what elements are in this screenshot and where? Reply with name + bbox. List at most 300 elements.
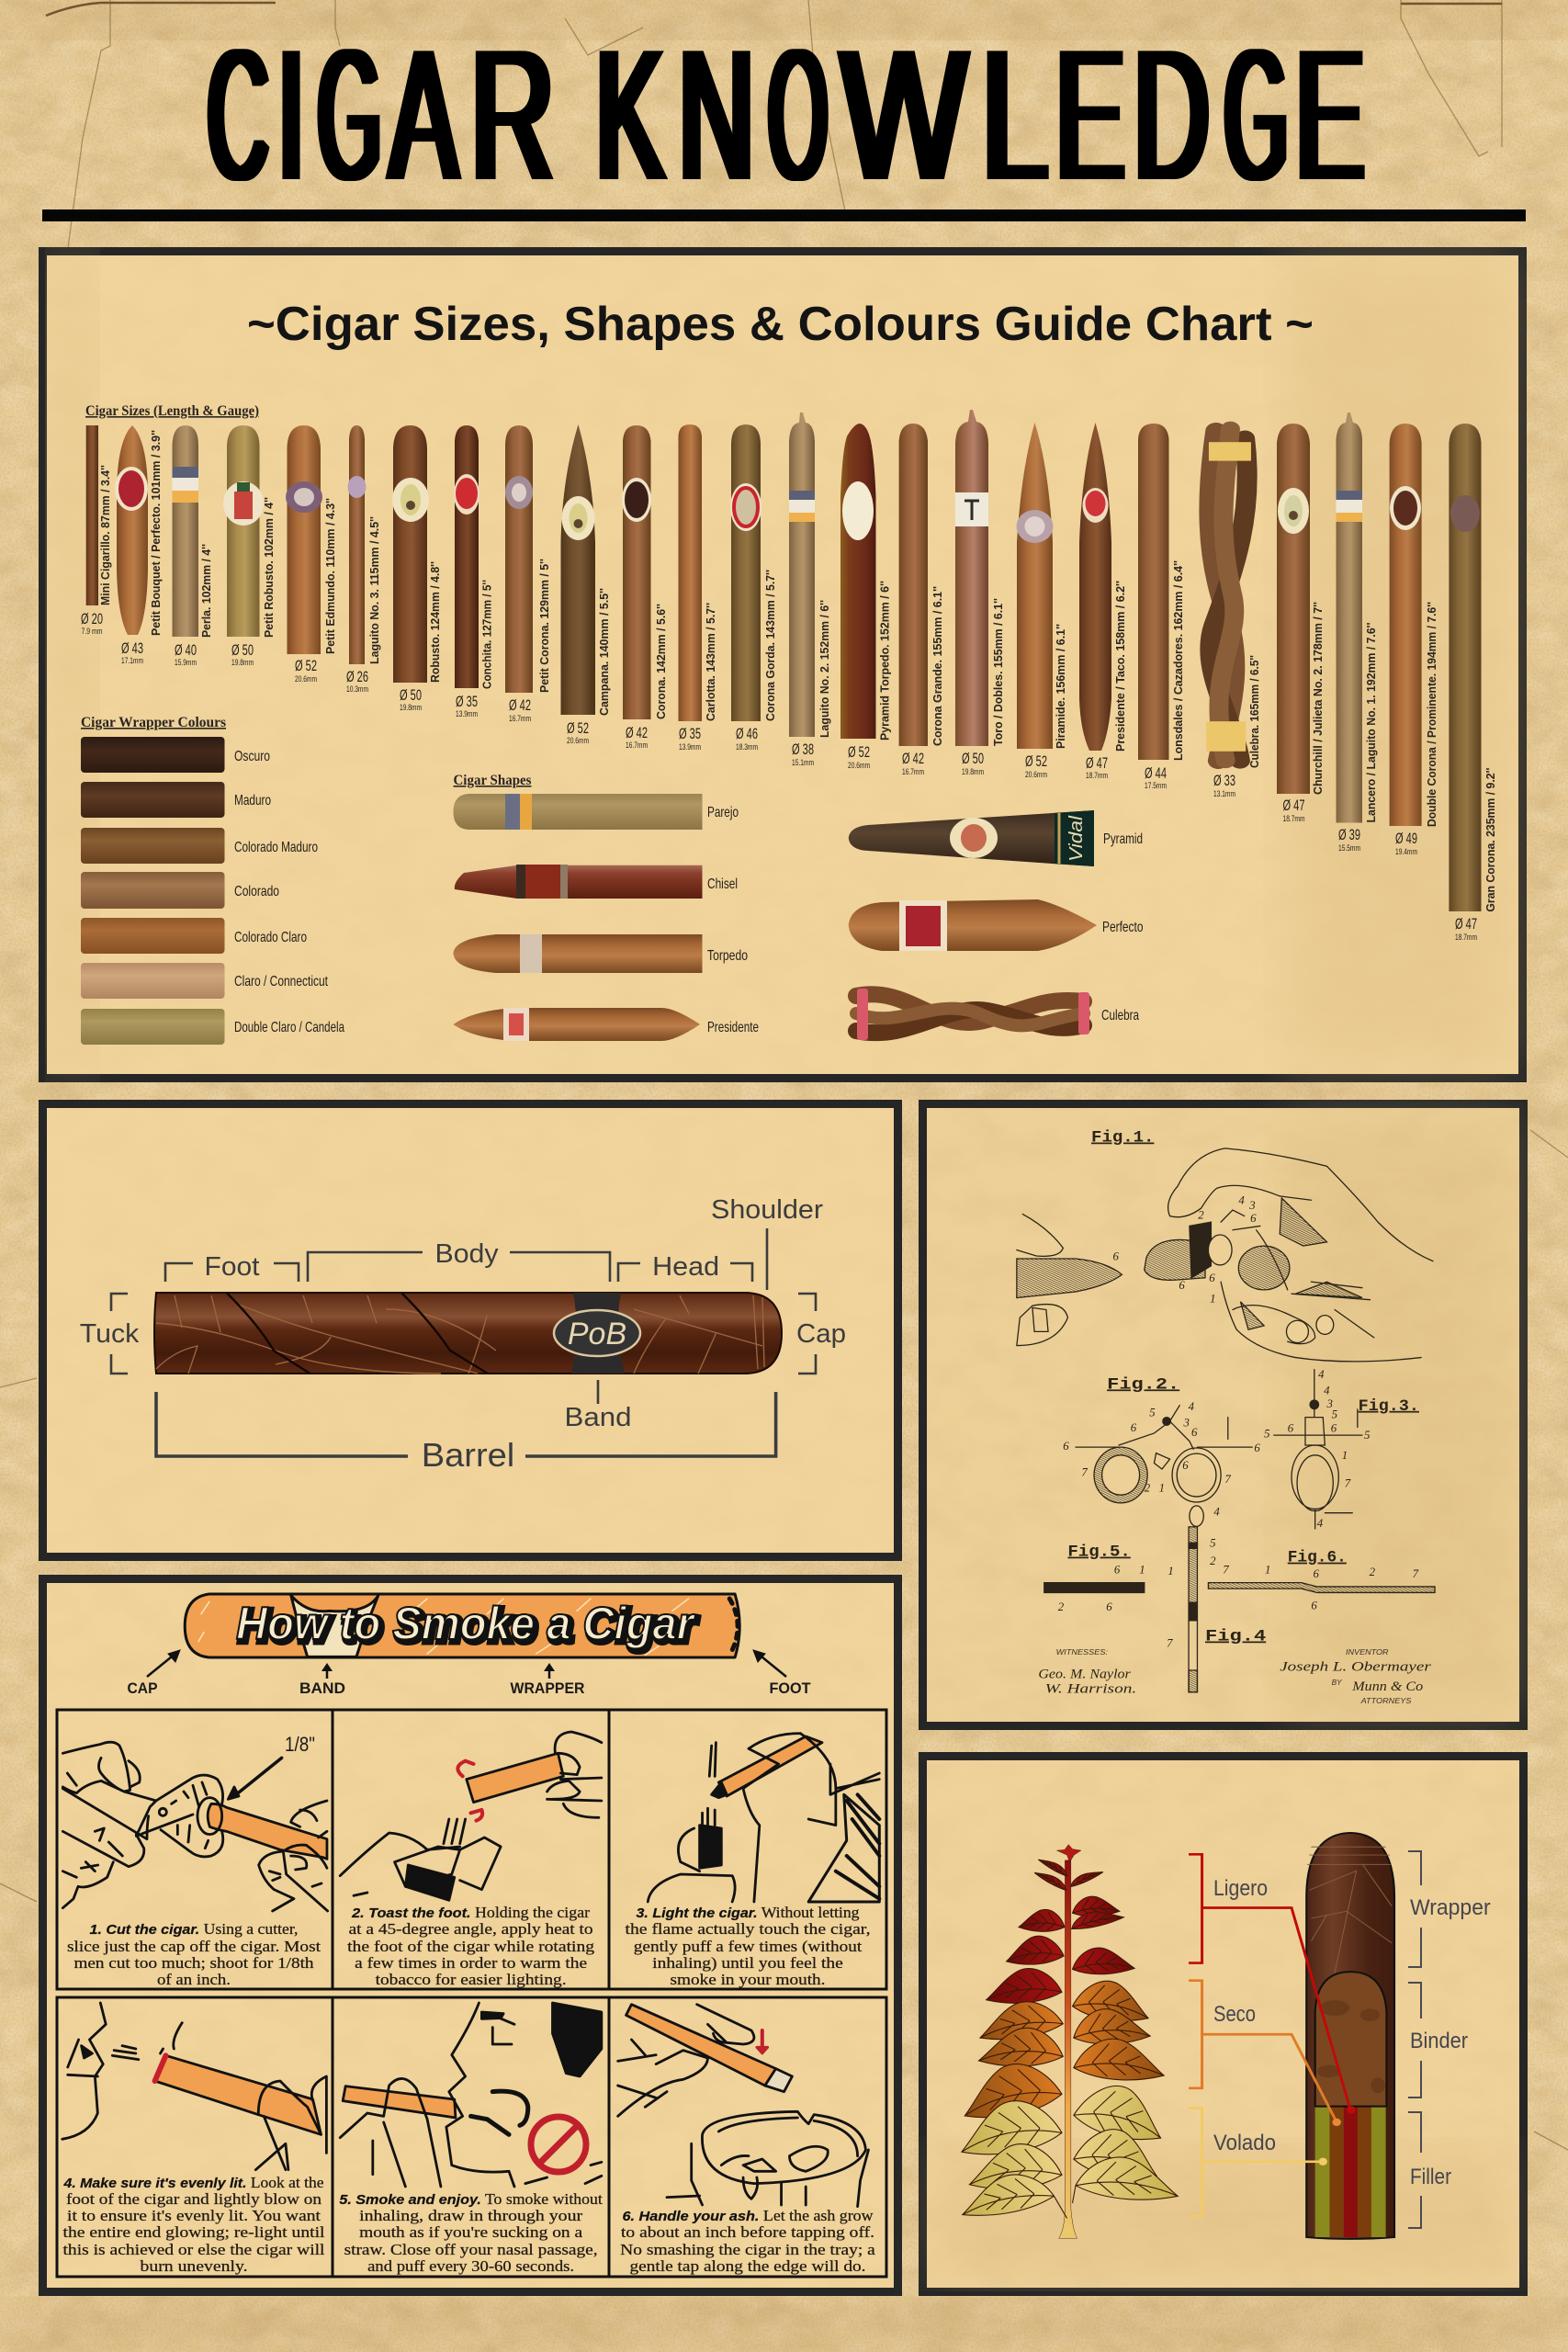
cigar: Petit Robusto: [223, 425, 276, 667]
figure 3: closed cutter: 1: [1342, 1448, 1348, 1462]
cigar: Robusto: [392, 425, 442, 712]
cigar: Corona: 16.7mm: [626, 741, 648, 750]
patent signatures: BY: [1332, 1678, 1343, 1687]
figure 3: closed cutter: Fig.3.: [1359, 1398, 1419, 1416]
cigar: Culebra: Ø 33: [1213, 772, 1235, 789]
chart heading: ~Cigar Sizes, Shapes & Colours Guide Chart ~: [247, 298, 1314, 351]
figure 3: closed cutter: 5: [1264, 1426, 1270, 1440]
caption: step 3: 3. Light the cigar. Without letting: [636, 1904, 860, 1921]
title: Cigar Knowledge: I: [279, 11, 303, 220]
cigar: Petit Bouquet: Ø 43: [121, 639, 143, 657]
patent signatures: Joseph L. Obermayer: [1280, 1659, 1431, 1674]
swatch: Colorado Claro: Colorado Claro: [234, 930, 307, 945]
figure 3: closed cutter: 7: [1345, 1476, 1351, 1490]
caption: step 5: and puff every 30-60 seconds.: [367, 2257, 574, 2275]
cigar: Churchill: [1277, 424, 1325, 823]
cigar: Presidente: Ø 47: [1086, 754, 1108, 772]
volado leaves: [953, 2077, 1182, 2222]
cigar: Mini Cigarillo: 7.9 mm: [81, 627, 103, 636]
cigar: Presidente: [1079, 423, 1127, 780]
shape: Culebra: [856, 989, 1139, 1040]
figure 6: section: 6: [1314, 1566, 1319, 1580]
figure 1: hands with cutter: [1017, 1129, 1433, 1362]
figure 1: hands with cutter: Fig.1.: [1091, 1129, 1154, 1148]
figure 5: edge bar: Fig.5.: [1067, 1544, 1131, 1562]
figure 6: section: 6: [1311, 1599, 1317, 1612]
title: Cigar Knowledge: G: [318, 11, 381, 220]
cigar: Gran Corona: [1449, 424, 1497, 942]
leaf priming: Volado: Volado: [1213, 2131, 1276, 2155]
cigar: Perla: Perla. 102mm / 4'': [199, 544, 213, 638]
heading: wrapper colours: Cigar Wrapper Colours: [81, 715, 226, 730]
caption: step 6: gentle tap along the edge will do.: [630, 2257, 865, 2275]
caption: step 1: men cut too much; shoot for 1/8th: [73, 1954, 314, 1972]
figure 4: side view: 5: [1210, 1535, 1216, 1550]
cigar: Petit Bouquet: [115, 425, 163, 665]
cigar: Campana: Ø 52: [567, 719, 589, 737]
cigar: Corona Grande: Corona Grande. 155mm / 6.1'': [931, 586, 944, 746]
swatch: Double Claro / Candela: Double Claro / Candela: [234, 1020, 344, 1035]
caption: step 4: foot of the cigar and lightly blow on: [66, 2190, 321, 2208]
caption: step 2: [347, 1904, 594, 1988]
cigar layer label: Binder: [1408, 1983, 1468, 2098]
figure 3: closed cutter: 5: [1364, 1428, 1371, 1442]
figure 2: open cutter: 6: [1191, 1425, 1198, 1439]
illustration: lighting the cigar: [648, 1734, 879, 1902]
cigar: Double Corona: Double Corona / Prominente. 194mm / 7.6'': [1425, 602, 1438, 827]
label and line: Band: Band: [564, 1403, 632, 1432]
cigar: Petit Bouquet: 17.1mm: [121, 656, 143, 665]
cigar: Corona Gorda: Corona Gorda. 143mm / 5.7'': [763, 570, 777, 721]
cigar: Double Corona: [1390, 424, 1438, 856]
cigar: Gran Corona: 18.7mm: [1455, 933, 1477, 942]
arrow and label: CAP: [127, 1650, 180, 1697]
cigar: Gran Corona: Gran Corona. 235mm / 9.2'': [1483, 768, 1497, 912]
cigar: Gran Corona: Ø 47: [1455, 915, 1477, 933]
cigar: Toro: Toro / Dobles. 155mm / 6.1'': [991, 598, 1005, 746]
bracket and label: Tuck: [80, 1294, 140, 1374]
step 5: smoke and enjoy: [339, 2003, 603, 2275]
cigar: Mini Cigarillo: Ø 20: [81, 610, 103, 628]
cigar: Petit Robusto: Ø 50: [231, 641, 254, 659]
panel: sizes, shapes and colours guide chart: [42, 252, 1523, 1079]
cigar: Petit Corona: Petit Corona. 129mm / 5'': [537, 559, 551, 693]
caption: step 5: 5. Smoke and enjoy. To smoke without: [339, 2190, 603, 2208]
figure 2: open cutter: 6: [1182, 1458, 1189, 1472]
cigar: Pyramid Torpedo: Ø 52: [848, 743, 870, 761]
shape: Parejo: Parejo: [707, 805, 739, 820]
title: Cigar Knowledge: K: [595, 11, 665, 220]
leaf priming: Seco: Seco: [1213, 2002, 1256, 2027]
cigar: Corona Grande: [899, 424, 944, 776]
cigar: Conchita: [454, 425, 494, 718]
cigar layer label: Filler: [1408, 2112, 1451, 2228]
caption: step 3: gently puff a few times (without: [634, 1938, 863, 1955]
label and line: Shoulder: Shoulder: [711, 1195, 823, 1225]
cigar: Lancero: Lancero / Laguito No. 1. 192mm / 7.6'': [1364, 623, 1378, 823]
cigar: Pyramid Torpedo: Pyramid Torpedo. 152mm / 6'': [878, 581, 892, 741]
cigar: Laguito No. 3: Ø 26: [346, 668, 368, 685]
figure 4: side view: Fig.4: [1205, 1628, 1266, 1646]
swatch: Oscuro: Oscuro: [234, 749, 270, 764]
caption: step 3: smoke in your mouth.: [671, 1971, 825, 1988]
cigar: Corona: Ø 42: [626, 724, 648, 741]
figure 6: section: 2: [1370, 1565, 1376, 1578]
banner: cigar with title: How to Smoke a Cigar: [239, 1600, 698, 1652]
swatch: Colorado Claro: [81, 918, 307, 954]
cigar: Laguito No. 2: Laguito No. 2. 152mm / 6'': [818, 600, 831, 738]
step 6: handle your ash: [618, 2005, 876, 2275]
panel: cigar anatomy: [42, 1104, 898, 1556]
cigar: Petit Edmundo: [286, 425, 337, 684]
cigar: Robusto: 19.8mm: [400, 703, 422, 712]
cigar: Mini Cigarillo: [81, 425, 112, 636]
cigar: Perla: [173, 425, 213, 667]
patent signatures: Munn & Co: [1351, 1679, 1423, 1694]
figure 6: section: Fig.6.: [1288, 1550, 1347, 1567]
patent signatures: W. Harrison.: [1045, 1682, 1136, 1697]
wrapper layer: [1306, 1833, 1394, 2239]
cigar: Corona Gorda: [730, 424, 777, 752]
leaf priming: Ligero: [1189, 1854, 1356, 2114]
cigar: Corona: Corona. 142mm / 5.6'': [654, 604, 668, 719]
arrow and label: BAND: [299, 1663, 345, 1697]
swatch: Colorado Maduro: [81, 828, 318, 864]
shape: Perfecto: [849, 899, 1144, 951]
caption: step 5: straw. Close off your nasal passage,: [344, 2241, 598, 2258]
cigar: Laguito No. 3: 10.3mm: [346, 684, 368, 694]
figure 3: closed cutter: 6: [1288, 1421, 1294, 1435]
cigar: Laguito No. 2: 15.1mm: [792, 758, 814, 767]
cigar: Conchita: Ø 35: [456, 693, 478, 710]
cigar: Carlotta: Ø 35: [679, 725, 701, 742]
panel: patent drawing of cigar cutter: [922, 1104, 1523, 1725]
cigar: Piramide: Ø 52: [1025, 752, 1047, 770]
cigar layer label: Wrapper: Wrapper: [1410, 1895, 1491, 1920]
illustration: tapping ash into ashtray: [618, 2005, 868, 2207]
heading: cigar sizes: Cigar Sizes (Length & Gauge): [85, 403, 259, 419]
banner: cigar with title: How to Smoke a Cigar: [236, 1598, 695, 1649]
bracket and label: Body: Body: [435, 1239, 499, 1269]
cigar: Lonsdales: 17.5mm: [1145, 781, 1167, 790]
tobacco plant: [953, 1845, 1182, 2238]
title: Cigar Knowledge: W: [840, 11, 967, 220]
figure 2: open cutter: 4: [1189, 1399, 1195, 1413]
step grid frames: [57, 1710, 886, 2277]
cigar: Robusto: Ø 50: [400, 686, 422, 704]
title: Cigar Knowledge: D: [1134, 11, 1209, 220]
illustration: cutter on cigar: [62, 1742, 328, 1911]
figure 5: edge bar: 1: [1139, 1563, 1145, 1577]
cigar layer label: Filler: Filler: [1410, 2165, 1451, 2189]
figure 2: open cutter: 6: [1131, 1420, 1137, 1434]
cigar: Culebra: 13.1mm: [1213, 789, 1235, 798]
swatch: Maduro: Maduro: [234, 793, 271, 808]
shape: Chisel: Chisel: [707, 876, 738, 892]
cigar body: [154, 1293, 782, 1374]
figure 1: hands with cutter: 3: [1248, 1198, 1256, 1212]
cigar: Lonsdales: Lonsdales / Cazadores. 162mm / 6.4'': [1171, 560, 1185, 761]
cigar: Campana: Campana. 140mm / 5.5'': [597, 588, 611, 716]
cigar: Churchill: 18.7mm: [1282, 814, 1304, 823]
shape: Torpedo: Torpedo: [707, 948, 748, 964]
ligero leaves: [983, 1855, 1134, 2007]
figure 2: open cutter: 7: [1224, 1472, 1231, 1486]
cigar: Presidente: 18.7mm: [1086, 771, 1108, 780]
cigar: Robusto: Robusto. 124mm / 4.8'': [428, 561, 442, 683]
figure 5: edge bar: [1044, 1544, 1145, 1613]
panel: how to smoke a cigar: [42, 1578, 898, 2291]
icon: no-inhale prohibition sign: [531, 2117, 586, 2172]
cigar: Lancero: [1336, 413, 1378, 853]
swatch: Colorado: Colorado: [234, 884, 279, 899]
caption: step 1: of an inch.: [157, 1971, 231, 1988]
swatch: Double Claro / Candela: [81, 1009, 344, 1045]
figure 1: hands with cutter: 2: [1198, 1208, 1204, 1222]
cigar: Lonsdales: Ø 44: [1145, 764, 1167, 782]
arrow and label: WRAPPER: [511, 1663, 584, 1697]
swatch: Oscuro: [81, 737, 270, 773]
shape: Torpedo: [454, 934, 748, 973]
shape: Chisel: [455, 865, 738, 899]
cigar: Piramide: [1016, 423, 1067, 779]
illustration: smoking profile with no-inhale sign: [340, 2003, 602, 2187]
figure 3: closed cutter: 4: [1318, 1367, 1325, 1381]
cigar: Petit Robusto: Petit Robusto. 102mm / 4'': [262, 497, 276, 638]
swatch: Claro / Connecticut: Claro / Connecticut: [234, 974, 328, 989]
caption: step 3: [625, 1904, 871, 1988]
swatch: Claro / Connecticut: [81, 963, 328, 999]
bracket and label: Head: [618, 1252, 752, 1282]
cigar: Toro: 19.8mm: [962, 767, 984, 776]
shape: Pyramid: Vidal: [1066, 815, 1087, 862]
cigar: Petit Corona: [505, 425, 551, 723]
cigar: Double Corona: Ø 49: [1395, 830, 1417, 847]
figure 4: side view: 4: [1213, 1505, 1220, 1519]
leaf priming: Ligero: Ligero: [1213, 1876, 1268, 1901]
cigar: Pyramid Torpedo: 20.6mm: [848, 761, 870, 770]
swatch: Colorado Maduro: Colorado Maduro: [234, 840, 318, 855]
cigar: Corona Gorda: 18.3mm: [736, 742, 758, 752]
panel: tobacco plant and cigar filler: [922, 1757, 1523, 2291]
seco leaves: [954, 1976, 1168, 2126]
illustration: toasting with lighter: [340, 1732, 602, 1900]
title: Cigar Knowledge: O: [769, 11, 828, 220]
bracket and label: Body: [308, 1239, 610, 1282]
arrow and label: WRAPPER: WRAPPER: [511, 1679, 584, 1697]
caption: step 2: 2. Toast the foot. Holding the cigar: [351, 1904, 591, 1921]
shape: Parejo: [454, 794, 739, 830]
shape: Pyramid: Pyramid: [1103, 831, 1143, 847]
figure 1: hands with cutter: 6: [1113, 1249, 1120, 1262]
title: Cigar Knowledge: N: [679, 11, 754, 220]
figure 2: open cutter: 6: [1063, 1439, 1069, 1453]
cigar layer label: Binder: Binder: [1410, 2029, 1468, 2053]
cigar: Churchill: Ø 47: [1282, 797, 1304, 814]
caption: step 4: the entire end glowing; re-light until: [62, 2223, 325, 2241]
patent signatures: ATTORNEYS: [1360, 1696, 1412, 1705]
cigar cross section: [1306, 1833, 1394, 2239]
label and line: Shoulder: [711, 1195, 823, 1290]
caption: step 6: [620, 2207, 876, 2275]
caption: step 6: to about an inch before tapping off.: [621, 2223, 874, 2241]
figure 3: closed cutter: [1264, 1367, 1419, 1530]
shape: Pyramid: [849, 810, 1143, 866]
cigar: Campana: [560, 424, 611, 745]
caption: step 5: [339, 2190, 603, 2275]
cigar: Piramide: 20.6mm: [1025, 770, 1047, 779]
cigar: Corona Grande: Ø 42: [902, 750, 924, 767]
figure 1: hands with cutter: 4: [1238, 1193, 1245, 1207]
cigar: Pyramid Torpedo: [840, 424, 892, 770]
figure 6: section: 7: [1413, 1566, 1419, 1580]
cigar: Petit Bouquet: Petit Bouquet / Perfecto. 101mm / 3.9'': [149, 430, 163, 636]
figure 2: open cutter: 5: [1149, 1405, 1156, 1419]
title: Cigar Knowledge: G: [1224, 11, 1288, 220]
bracket and label: Cap: Cap: [796, 1319, 846, 1349]
figure 3: closed cutter: 4: [1317, 1516, 1324, 1530]
leaf priming: Volado: [1189, 2109, 1327, 2216]
figure 6: section: 1: [1265, 1563, 1270, 1577]
bracket and label: Foot: Foot: [204, 1252, 259, 1282]
caption: step 3: inhaling) until you feel the: [652, 1954, 843, 1972]
cigar: Presidente: Presidente / Taco. 158mm / 6.2'': [1113, 581, 1127, 752]
caption: step 6: 6. Handle your ash. Let the ash grow: [623, 2207, 874, 2224]
cigar band with medallion: [554, 1293, 640, 1374]
filler layer: [1315, 2107, 1386, 2237]
cigar: Carlotta: [678, 424, 717, 752]
caption: step 6: No smashing the cigar in the tray; a: [620, 2241, 876, 2258]
title: Cigar Knowledge: R: [470, 11, 555, 220]
patent signatures: [1038, 1647, 1431, 1705]
figure 4: side view: 7: [1167, 1635, 1173, 1649]
cigar: Double Corona: 19.4mm: [1395, 847, 1417, 856]
shape: Presidente: [454, 1008, 759, 1041]
bracket and label: Foot: [165, 1252, 299, 1282]
figure 2: open cutter: 7: [1081, 1464, 1088, 1478]
cigar: Toro: [955, 410, 1005, 776]
swatch: Maduro: [81, 782, 271, 818]
title: Cigar Knowledge: E: [1056, 11, 1124, 220]
patent signatures: Geo. M. Naylor: [1038, 1668, 1131, 1682]
swatch: Colorado: [81, 872, 279, 909]
caption: step 4: [62, 2174, 325, 2275]
patent signatures: INVENTOR: [1346, 1647, 1389, 1657]
title: Cigar Knowledge: A: [389, 11, 457, 220]
step 4: make sure it is evenly lit: [62, 2003, 326, 2275]
cigar: Toro: Ø 50: [962, 750, 984, 767]
cigar: Culebra: [1206, 429, 1261, 798]
arrow and label: FOOT: [753, 1650, 811, 1697]
figure 3: closed cutter: 6: [1331, 1421, 1337, 1435]
figure 2: open cutter: 1: [1159, 1480, 1165, 1494]
figure 1: hands with cutter: 1: [1210, 1292, 1216, 1306]
bracket and label: Barrel: [156, 1392, 776, 1474]
stem: [1059, 1860, 1077, 2238]
arrow and label: FOOT: FOOT: [770, 1679, 811, 1697]
cigar band with medallion: PoB: [568, 1317, 626, 1351]
figure 5: edge bar: 2: [1058, 1600, 1065, 1613]
caption: step 1: slice just the cap off the cigar. Most: [67, 1938, 321, 1955]
binder layer: [1315, 1972, 1386, 2107]
cigar: Laguito No. 3: Laguito No. 3. 115mm / 4.5'': [367, 516, 381, 664]
drawing: patent figures: [1017, 1129, 1435, 1705]
cigar: Carlotta: Carlotta. 143mm / 5.7'': [704, 603, 717, 721]
figure 4: side view: 2: [1210, 1554, 1216, 1567]
cigar: Mini Cigarillo: Mini Cigarillo. 87mm / 3.4'': [98, 465, 112, 605]
cigar: Petit Edmundo: Petit Edmundo. 110mm / 4.3'': [323, 498, 337, 654]
figure 3: closed cutter: 3: [1326, 1396, 1333, 1410]
cigar: Lancero: Ø 39: [1338, 826, 1360, 843]
figure 4: side view: [1167, 1505, 1266, 1692]
shape: Presidente: Presidente: [707, 1020, 759, 1035]
label and line: Band: [564, 1380, 632, 1432]
caption: step 1: [67, 1920, 321, 1988]
bracket and label: Barrel: Barrel: [422, 1436, 514, 1474]
cigar: Laguito No. 2: [789, 413, 831, 767]
figure 5: edge bar: 6: [1114, 1563, 1121, 1577]
arrow and label: CAP: CAP: [127, 1679, 158, 1697]
cigar: Piramide: Piramide. 156mm / 6.1'': [1054, 624, 1067, 749]
figure 2: open cutter: 2: [1145, 1480, 1151, 1494]
shape: Perfecto: Perfecto: [1102, 920, 1144, 935]
cigar: Petit Corona: 16.7mm: [509, 714, 531, 723]
heading: cigar shapes: Cigar Shapes: [454, 773, 531, 788]
caption: step 3: the flame actually touch the cigar,: [625, 1920, 871, 1938]
title: Cigar Knowledge: C: [208, 11, 268, 220]
caption: step 2: at a 45-degree angle, apply heat to: [349, 1920, 593, 1938]
figure 2: open cutter: 3: [1183, 1416, 1190, 1430]
cigar: Laguito No. 2: Ø 38: [792, 741, 814, 758]
cigar: Culebra: Culebra. 165mm / 6.5'': [1247, 655, 1261, 768]
caption: step 4: 4. Make sure it's evenly lit. Look at the: [62, 2174, 323, 2191]
cigar: Campana: 20.6mm: [567, 736, 589, 745]
figure 5: edge bar: 6: [1106, 1600, 1112, 1613]
caption: step 5: mouth as if you're sucking on a: [359, 2223, 583, 2241]
shape: Culebra: Culebra: [1101, 1008, 1139, 1023]
cigar: Petit Robusto: 19.8mm: [231, 658, 254, 667]
cigar: Petit Edmundo: Ø 52: [295, 657, 317, 674]
cigar: Corona Gorda: Ø 46: [736, 725, 758, 742]
step 2: toast the foot: [340, 1732, 602, 1988]
title underline rule: [42, 209, 1526, 221]
bracket and label: Tuck: Tuck: [80, 1319, 140, 1349]
illustration: blowing on lit foot: [62, 2003, 326, 2170]
title: Cigar Knowledge: E: [1295, 11, 1365, 220]
figure 3: closed cutter: 5: [1332, 1407, 1338, 1421]
step 3: light the cigar: [625, 1734, 879, 1988]
caption: step 4: burn unevenly.: [140, 2257, 248, 2275]
cigar: Conchita: 13.9mm: [456, 709, 478, 718]
cigar layer label: Wrapper: [1408, 1851, 1491, 1967]
caption: step 4: it to ensure it's evenly lit. You want: [67, 2207, 321, 2224]
patent signatures: WITNESSES:: [1056, 1647, 1109, 1657]
cigar: Perla: Ø 40: [175, 641, 197, 659]
cigar: Lancero: 15.5mm: [1338, 843, 1360, 853]
figure 3: closed cutter: 4: [1324, 1383, 1330, 1396]
figure 2: open cutter: [1063, 1376, 1260, 1503]
figure 4: side view: 1: [1168, 1564, 1174, 1577]
figure 6: section: [1208, 1550, 1435, 1612]
cigar: Petit Edmundo: 20.6mm: [295, 674, 317, 684]
cigar: Laguito No. 3: [346, 425, 381, 694]
caption: step 4: this is achieved or else the cigar will: [62, 2241, 325, 2258]
step 1: cut the cigar: [62, 1733, 328, 1988]
caption: step 2: a few times in order to warm the: [355, 1954, 587, 1972]
flower head: [1056, 1845, 1081, 1860]
title: Cigar Knowledge: L: [982, 11, 1048, 220]
cigar: Lonsdales: [1138, 424, 1185, 790]
